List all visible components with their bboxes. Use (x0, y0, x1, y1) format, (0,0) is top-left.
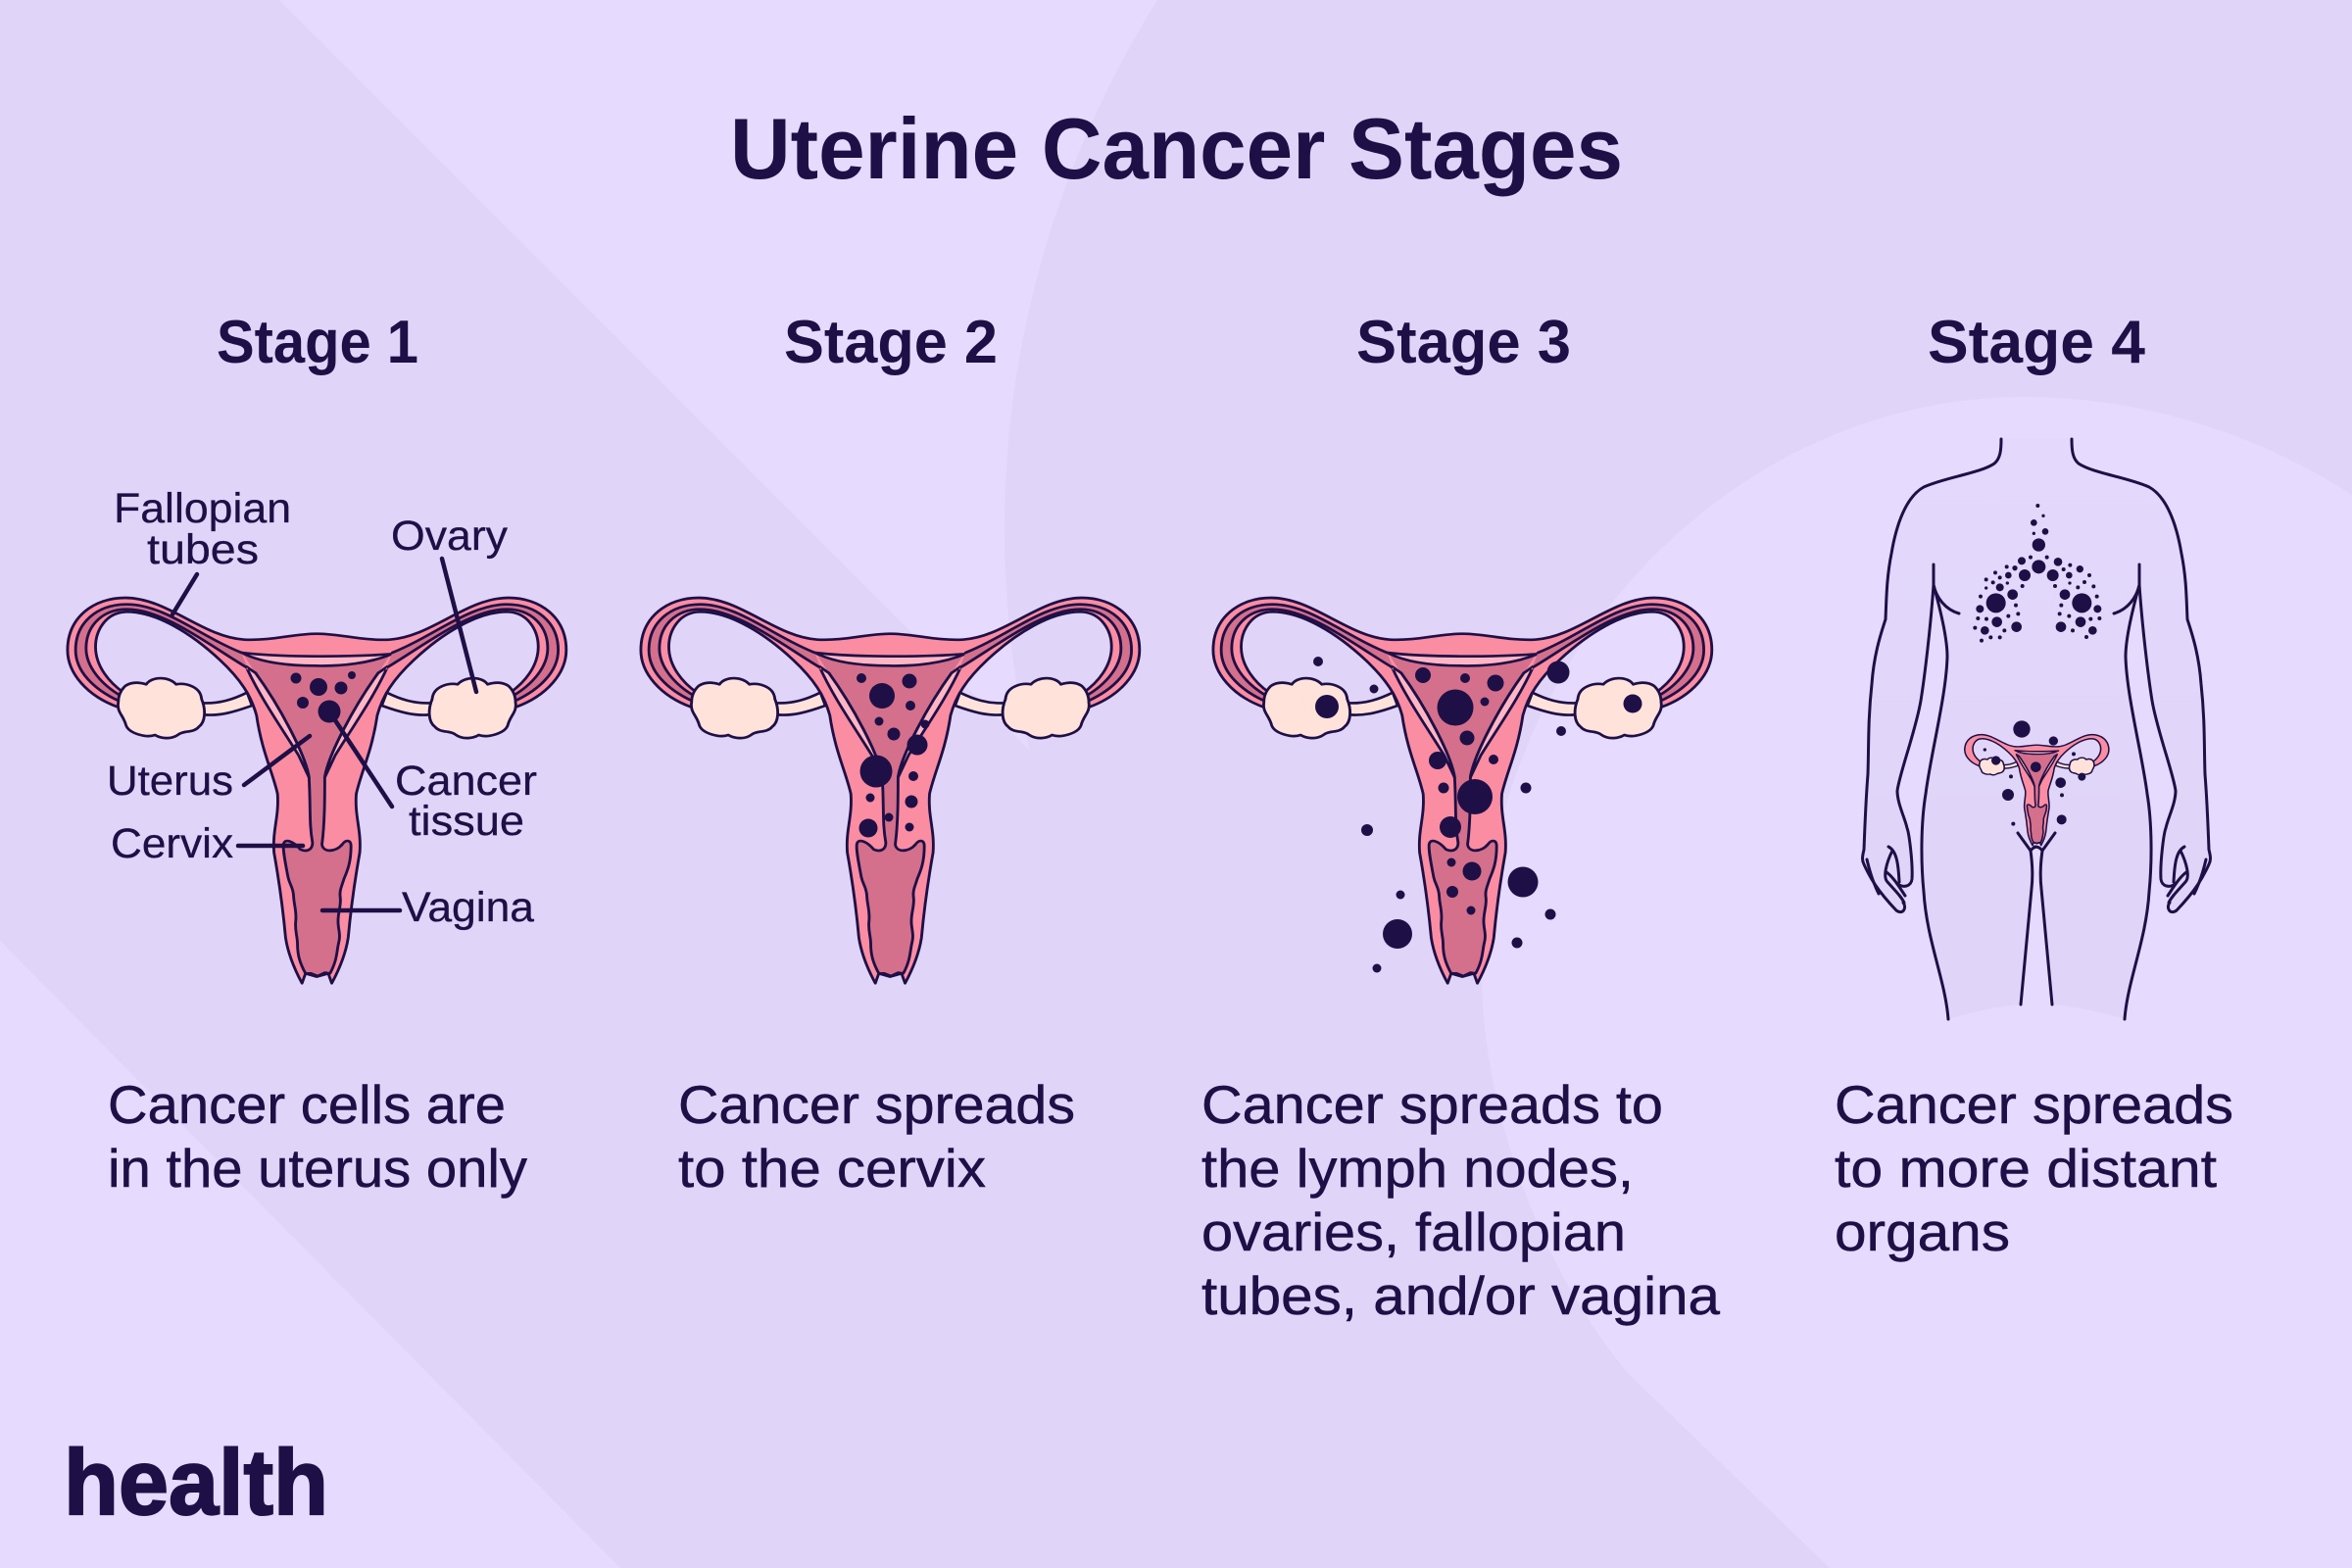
heading: stage 1: Stage 1 (217, 309, 418, 376)
diagram: stage 1 uterus with labels: Fallopian (114, 485, 291, 532)
diagram: stage 4 body silhouette with lungs and uterus (1862, 439, 2211, 1019)
text block: stage 3 description (1201, 1074, 1720, 1326)
diagram: stage 1 uterus with labels: Uterus (107, 758, 233, 805)
text block: stage 3 description: the lymph nodes, (1201, 1138, 1634, 1199)
text block: stage 4 description: Cancer spreads (1835, 1074, 2233, 1135)
text block: stage 1 description (108, 1074, 528, 1199)
heading: stage 4: Stage 4 (1928, 309, 2146, 376)
text block: stage 4 description: to more distant (1835, 1138, 2217, 1199)
text block: stage 2 description: to the cervix (678, 1138, 986, 1199)
text block: stage 2 description (678, 1074, 1075, 1199)
text block: stage 4 description (1835, 1074, 2233, 1262)
text block: stage 1 description: Cancer cells are (108, 1074, 506, 1135)
title: Uterine Cancer Stages (730, 100, 1623, 197)
text block: stage 3 description: Cancer spreads to (1201, 1074, 1663, 1135)
text block: stage 4 description: organs (1835, 1201, 2010, 1262)
diagram: stage 1 uterus with labels: Vagina (402, 884, 534, 931)
diagram: stage 1 uterus with labels: Cancer (395, 758, 537, 805)
diagram: stage 1 uterus with labels: Cervix (111, 820, 234, 867)
text block: stage 2 description: Cancer spreads (678, 1074, 1075, 1135)
text block: stage 3 description: tubes, and/or vagina (1201, 1265, 1720, 1326)
heading: stage 3: Stage 3 (1356, 309, 1571, 376)
heading: stage 2: Stage 2 (784, 309, 998, 376)
diagram: stage 2 uterus (641, 598, 1140, 983)
diagram: stage 1 uterus with labels (68, 485, 566, 983)
text block: stage 3 description: ovaries, fallopian (1201, 1201, 1626, 1262)
text block: stage 1 description: in the uterus only (108, 1138, 528, 1199)
diagram: stage 3 uterus (1213, 598, 1712, 983)
diagram: stage 1 uterus with labels: tubes (147, 526, 259, 573)
diagram: stage 1 uterus with labels: tissue (409, 798, 524, 845)
logo: health: health (64, 1431, 328, 1535)
diagram: stage 1 uterus with labels: Ovary (391, 513, 509, 560)
